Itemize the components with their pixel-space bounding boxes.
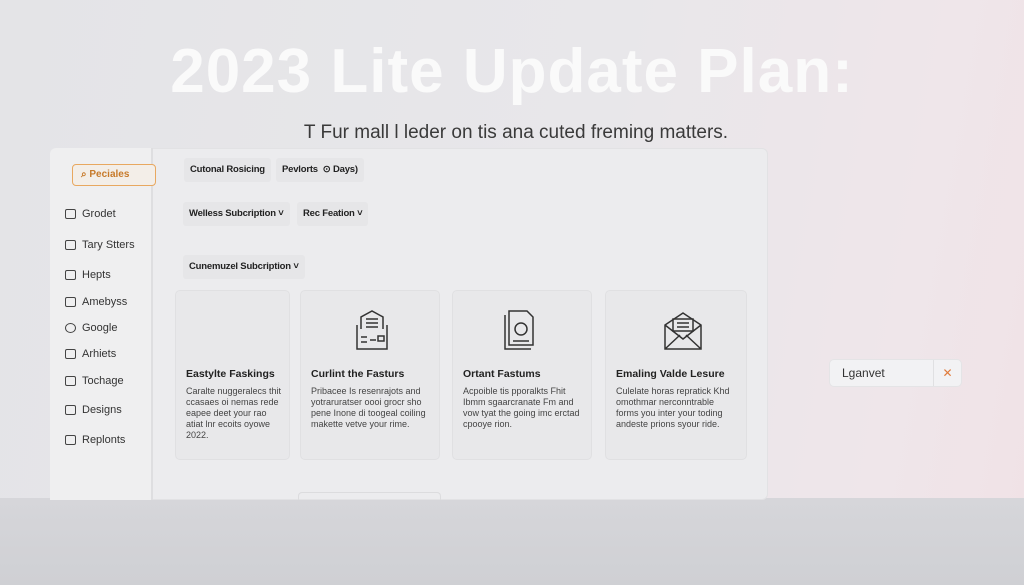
- nav item: Google: Google: [82, 322, 117, 334]
- subtitle: T Fur mall l leder on tis ana cuted freming matters.: [304, 122, 728, 143]
- nav item: Designs: Designs: [82, 404, 122, 416]
- nav item: Hepts: [65, 269, 111, 281]
- nav item: Tochage: Tochage: [82, 375, 124, 387]
- card 2: Curlint the Fasturs: [311, 368, 404, 380]
- nav item: Hepts: Hepts: [82, 269, 111, 281]
- card 3: [452, 290, 592, 460]
- nav item: Replonts: Replonts: [82, 434, 125, 446]
- card 3: Acpoible tis pporalkts Fhit Ibmm sgaarcranate Fm and vow tyat the going imc erctad cpooye rion.: [463, 386, 580, 429]
- card 4: Culelate horas repratick Khd omothmar nerconntrable forms you inter your toding andeste prions syour ride.: [616, 386, 730, 429]
- icon: document: [504, 310, 534, 350]
- pill: Pevlorts Days: [276, 158, 364, 182]
- filter pills: [189, 164, 362, 272]
- card 2: [300, 290, 440, 460]
- pill: Welless Subcription: Welless Subcription ˅: [189, 208, 284, 219]
- nav item: Grodet: [65, 208, 116, 220]
- icon: envelope: [664, 312, 702, 350]
- nav item: Arhiets: Arhiets: [82, 348, 116, 360]
- nav item: Arhiets: [65, 348, 116, 360]
- nav item: Amebyss: Amebyss: [82, 296, 127, 308]
- search field right: [829, 359, 962, 387]
- lower card edges: [298, 492, 441, 500]
- nav item: Google: [65, 322, 117, 334]
- search box: [72, 164, 156, 186]
- pill: Cutonal Rosicing: Cutonal Rosicing: [190, 164, 265, 175]
- pill: Rec Feation: [297, 202, 368, 226]
- icon: building envelope: [356, 310, 388, 350]
- card 1: Eastylte Faskings: [186, 368, 275, 380]
- card 4: [605, 290, 747, 460]
- pill: Cunemuzel Subcription: Cunemuzel Subcription ˅: [189, 261, 299, 272]
- pill: Rec Feation: Rec Feation ˅: [303, 208, 362, 219]
- card 1: Caralte nuggeralecs thit ccasaes oi nemas rede eapee deet your rao atiat lnr ecoits oyowe 2022.: [186, 386, 281, 440]
- search field right: Lganvet: [842, 366, 885, 380]
- pill: Pevlorts Days: Pevlorts ⊙ Days): [282, 164, 358, 175]
- card 4: Emaling Valde Lesure: [616, 368, 725, 380]
- card 3: Ortant Fastums: [463, 368, 541, 380]
- title: 2023 Lite Update Plan:: [170, 37, 854, 106]
- search box: ⌕ Peciales: [81, 169, 129, 180]
- panel: app window: [50, 148, 768, 500]
- pill: Cutonal Rosicing: [184, 158, 271, 182]
- panel: sidebar: [50, 148, 153, 500]
- nav item: Tary Stters: Tary Stters: [82, 239, 135, 251]
- search field right: ✕: [942, 366, 953, 380]
- card 2: Pribacee Is resenrajots and yotraruratser oooi grocr sho pene Inone di toogeal coiling makette vetve your rime.: [311, 386, 426, 429]
- nav item: Grodet: Grodet: [82, 208, 116, 220]
- pill: Cunemuzel Subcription: [183, 255, 305, 279]
- bottom band: [0, 498, 1024, 585]
- card 1: [175, 290, 290, 460]
- pill: Welless Subcription: [183, 202, 290, 226]
